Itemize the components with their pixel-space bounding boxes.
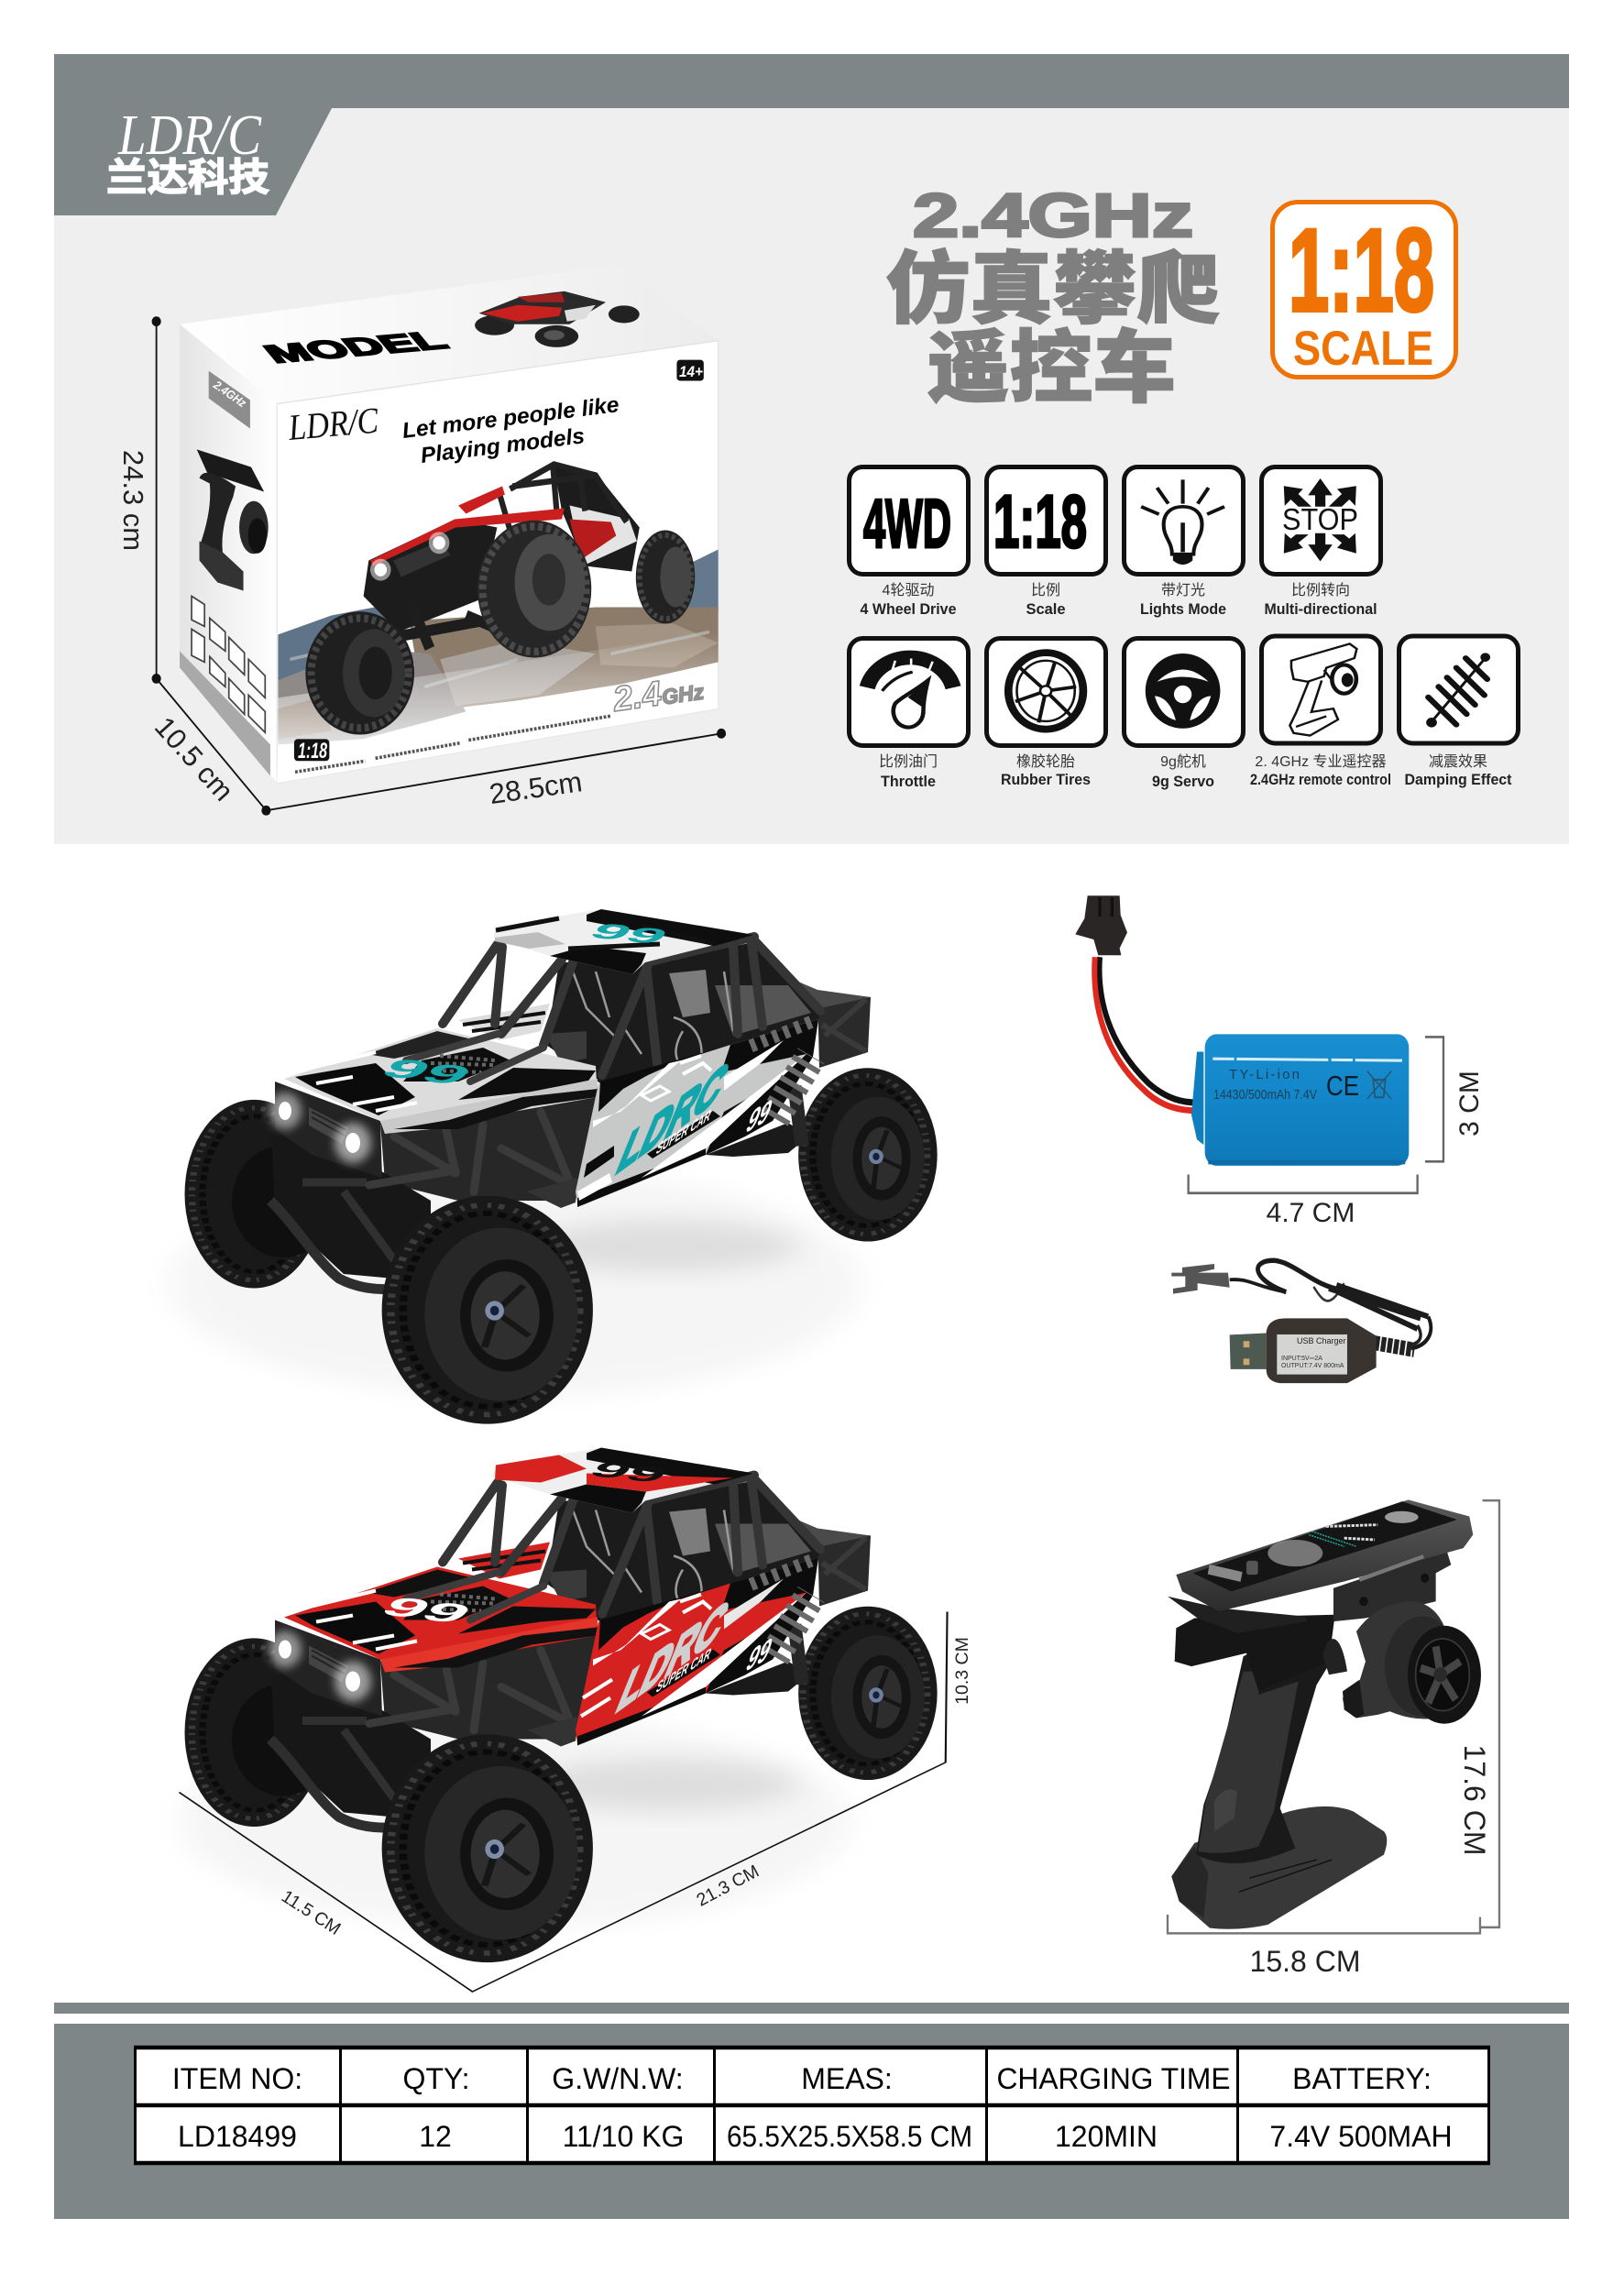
specification table: ITEM NO: — [172, 2062, 302, 2095]
feature icon: 1:18 scale: 1:18 — [993, 480, 1087, 564]
packaging box: 1:18 — [298, 739, 327, 763]
specification table: LD18499 — [178, 2120, 297, 2153]
teal roof decal: 99 — [582, 919, 676, 949]
feature icon: damper: Damping Effect — [1404, 772, 1512, 788]
box dimension lines: 28.5cm — [488, 765, 584, 810]
box top mini car — [475, 291, 640, 347]
packaging box: MODEL — [257, 326, 455, 368]
car shadow and far wheels — [170, 1068, 938, 1396]
battery pack — [1075, 895, 1409, 1166]
red side decal — [576, 1558, 818, 1745]
red side decal: LDRC — [609, 1586, 738, 1726]
box dimension lines: 24.3 cm — [117, 450, 149, 551]
teal side decal: LDRC — [609, 1047, 738, 1188]
feature icon: damper — [1399, 636, 1518, 788]
specification table: 11/10 KG — [563, 2120, 684, 2153]
feature icon: damper: 减震效果 — [1429, 753, 1487, 770]
feature icon: rubber tires — [986, 638, 1105, 788]
car dimension lines: 10.3 CM — [952, 1637, 972, 1705]
box dimension lines: 10.5 cm — [148, 710, 240, 807]
feature icon: multi-directional STOP — [1261, 467, 1380, 618]
car dimension lines: 11.5 CM — [278, 1886, 345, 1939]
footer panel — [54, 2024, 1569, 2219]
feature icon: multi-directional STOP: 比例转向 — [1291, 582, 1350, 598]
car: red version: 99 — [371, 1592, 481, 1629]
product title: 2.4GHz — [913, 181, 1193, 250]
box side remote — [192, 371, 269, 732]
feature icon: lights: Lights Mode — [1140, 601, 1226, 618]
feature icon: 1:18 scale: 比例 — [1031, 582, 1060, 598]
specification table — [134, 2046, 1490, 2165]
red side decal: SUPER CAR — [654, 1645, 713, 1697]
packaging box: Let more people like — [401, 392, 620, 444]
feature icon: lights — [1124, 467, 1243, 618]
teal side decal: 99 — [741, 1090, 777, 1141]
feature icon: servo steering wheel: 9g Servo — [1152, 774, 1214, 790]
USB charger: USB Charger — [1297, 1336, 1346, 1345]
red side decal: 99 — [741, 1629, 777, 1679]
battery dimensions: 4.7 CM — [1267, 1198, 1355, 1228]
feature icon: servo steering wheel — [1124, 638, 1243, 790]
car dimension lines — [179, 1611, 972, 1992]
red roof decal: 99 — [582, 1457, 676, 1487]
scale badge — [1272, 202, 1455, 378]
packaging box: 2.4GHz — [609, 668, 707, 719]
packaging box: LDR/C — [286, 399, 381, 448]
specification table: QTY: — [403, 2062, 469, 2095]
teal roof decal — [493, 909, 754, 974]
specification table: 7.4V 500MAH — [1269, 2120, 1453, 2153]
USB charger: OUTPUT:7.4V 800mA — [1281, 1363, 1344, 1369]
battery pack: CE — [1326, 1070, 1359, 1102]
box photo rocks — [277, 550, 719, 783]
feature icon: remote control: 2. 4GHz 专业遥控器 — [1255, 753, 1387, 770]
feature icon: 4WD: 4 Wheel Drive — [860, 601, 957, 618]
logo — [106, 104, 269, 199]
specification table: BATTERY: — [1292, 2062, 1432, 2095]
logo: 兰达科技 — [106, 156, 269, 199]
car: teal version: 99 — [371, 1053, 481, 1091]
scale badge: 1:18 — [1289, 205, 1434, 336]
footer bar — [54, 2003, 1569, 2014]
packaging box: 2.4GHz — [211, 378, 249, 411]
specification table: CHARGING TIME — [997, 2062, 1230, 2095]
header panel background — [54, 54, 1569, 844]
feature icon: rubber tires: 橡胶轮胎 — [1016, 753, 1075, 770]
specification table: G.W/N.W: — [552, 2062, 684, 2095]
teal hood decal — [284, 1004, 598, 1134]
product title: 仿真攀爬 — [886, 246, 1220, 334]
car: red version — [181, 1448, 938, 1962]
red hood decal — [284, 1542, 598, 1672]
car: teal version — [170, 909, 938, 1424]
feature icon: 4WD: 4WD — [863, 485, 951, 562]
packaging box: Playing models — [419, 423, 586, 468]
USB charger — [1171, 1260, 1431, 1383]
scale badge: SCALE — [1293, 322, 1433, 376]
USB charger: INPUT:5V⎓2A — [1281, 1356, 1322, 1362]
red roof decal — [493, 1448, 754, 1512]
specification table: 120MIN — [1055, 2120, 1158, 2153]
box dimension lines — [117, 316, 726, 816]
remote dimensions: 17.6 CM — [1458, 1745, 1491, 1855]
feature icon: multi-directional STOP: Multi-directional — [1265, 601, 1377, 618]
feature icon: servo steering wheel: 9g舵机 — [1160, 753, 1206, 770]
feature icon: throttle: Throttle — [881, 774, 936, 790]
specification table: MEAS: — [801, 2062, 893, 2095]
remote dimensions — [1168, 1500, 1499, 1978]
battery pack: TY-Li-ion — [1229, 1067, 1300, 1082]
feature icon: throttle — [849, 638, 968, 790]
red car front wheel and headlights — [269, 1631, 593, 1962]
logo: LDR/C — [117, 104, 262, 167]
feature icon: 1:18 scale — [986, 467, 1105, 618]
remote dimensions: 15.8 CM — [1250, 1945, 1360, 1978]
feature icon: remote control: 2.4GHz remote control — [1250, 772, 1391, 788]
teal side decal — [576, 1019, 818, 1207]
battery dimensions: 3 CM — [1454, 1071, 1485, 1136]
battery pack: 14430/500mAh 7.4V — [1213, 1087, 1317, 1103]
car dimension lines: 21.3 CM — [693, 1861, 763, 1911]
packaging box: 14+ — [679, 363, 703, 380]
feature icon: throttle: 比例油门 — [879, 753, 938, 770]
box photo car — [305, 465, 695, 735]
car front wheel and headlights — [269, 1093, 593, 1424]
product title — [886, 181, 1220, 412]
packaging box — [180, 265, 719, 783]
header bar and logo tab — [54, 54, 1569, 215]
feature icon: 4WD: 4轮驱动 — [883, 582, 934, 598]
product title: 遥控车 — [927, 324, 1176, 412]
teal side decal: SUPER CAR — [654, 1106, 713, 1159]
red car shadow and far wheels — [181, 1607, 938, 1927]
feature icon: remote control — [1250, 636, 1391, 788]
feature icon: 4WD — [849, 467, 968, 618]
battery dimensions — [1189, 1037, 1485, 1228]
feature icon: multi-directional STOP: STOP — [1282, 502, 1358, 536]
feature icon: 1:18 scale: Scale — [1026, 601, 1066, 618]
specification table: 12 — [419, 2120, 452, 2153]
feature icon: rubber tires: Rubber Tires — [1001, 772, 1091, 788]
remote control — [1168, 1499, 1481, 1929]
specification table: 65.5X25.5X58.5 CM — [727, 2120, 972, 2153]
feature icon: lights: 带灯光 — [1161, 582, 1205, 598]
